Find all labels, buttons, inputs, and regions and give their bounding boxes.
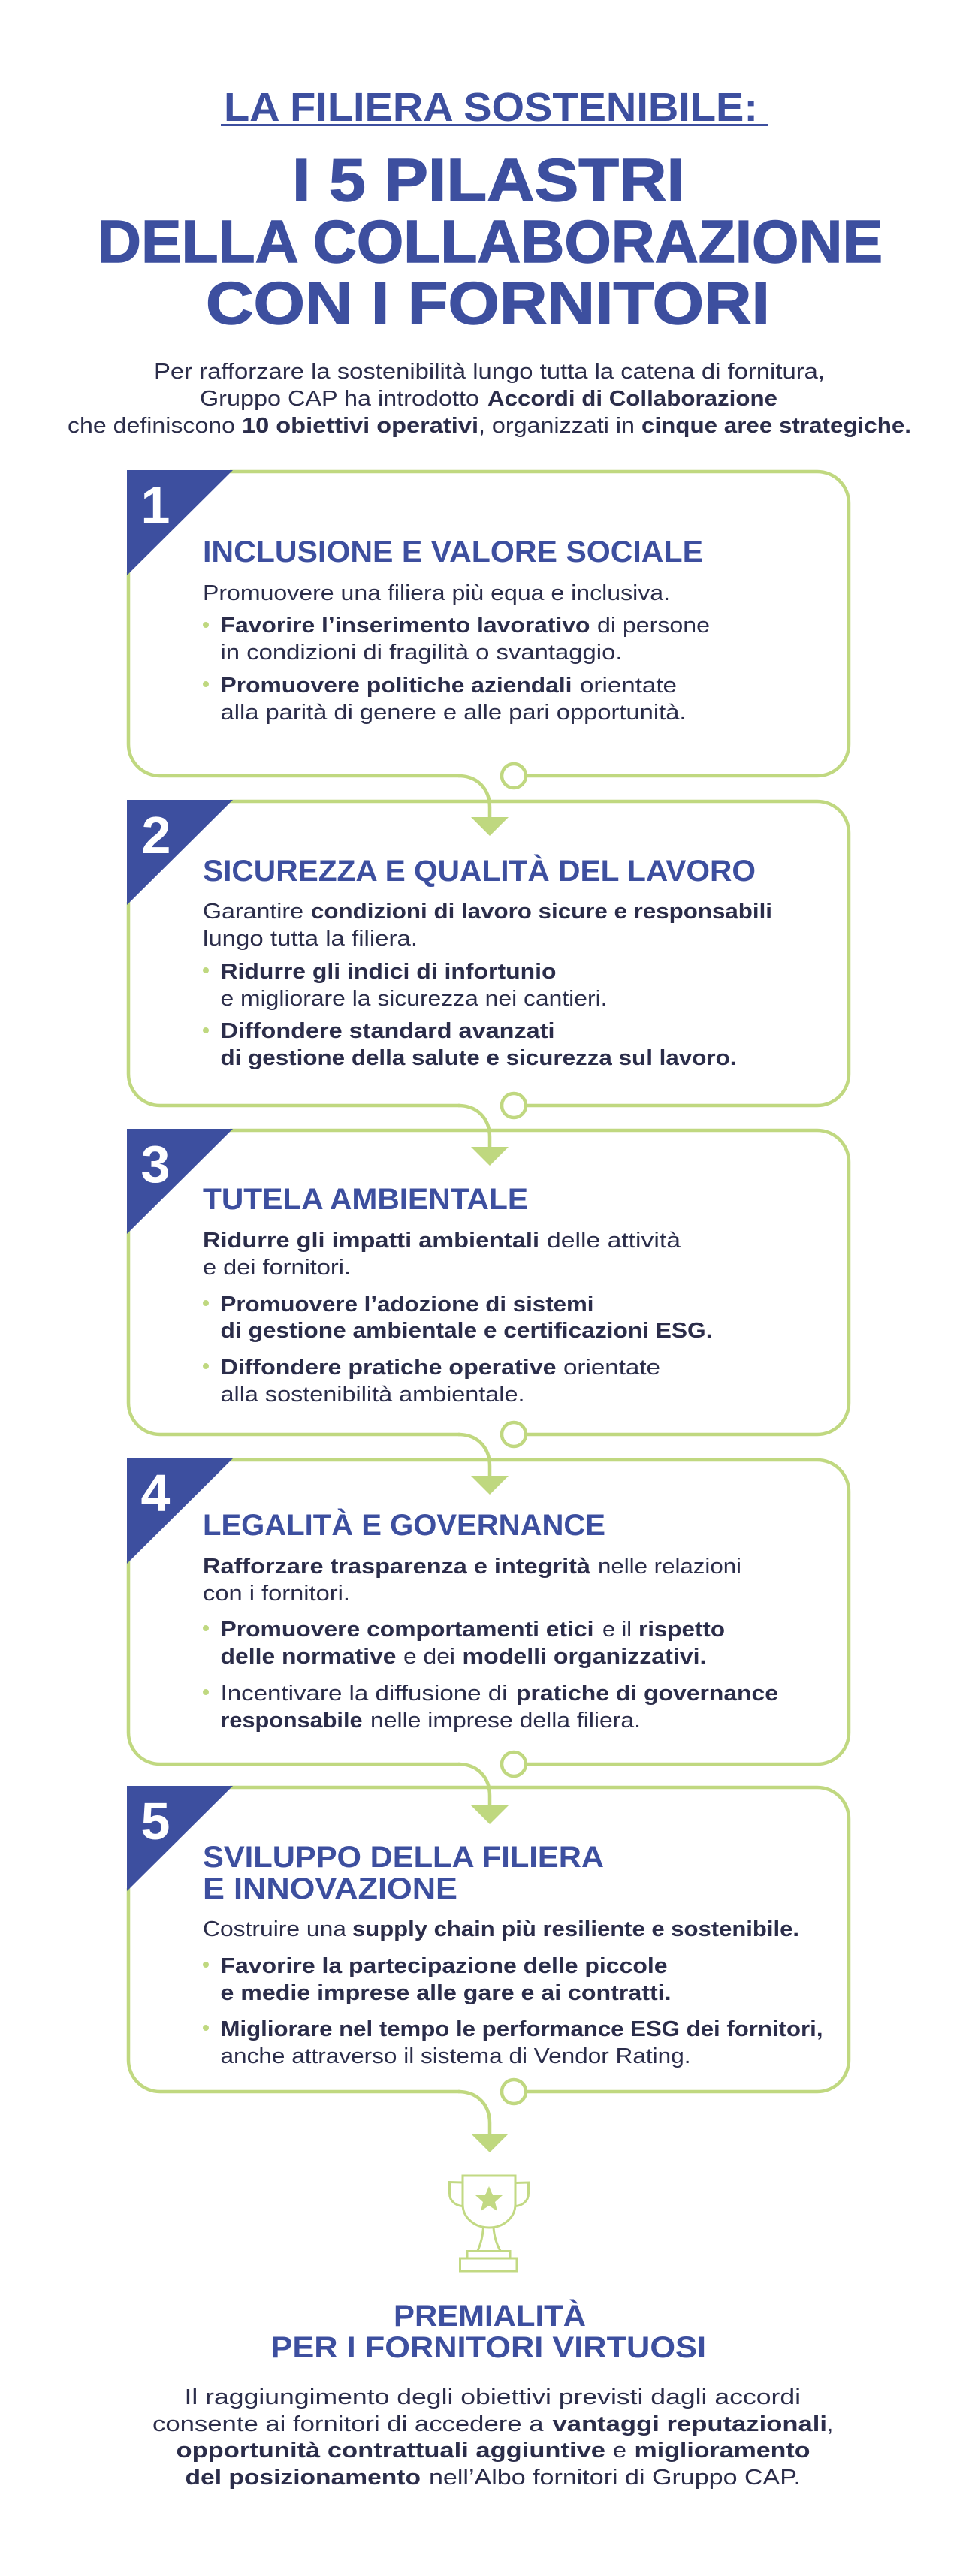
heading 5: E INNOVAZIONE [203,1872,457,1905]
number badge 4 [127,1458,233,1564]
bullet 1.1 [203,614,710,665]
intro text: 10 obiettivi operativi [242,414,478,438]
bullet 4.2 [203,1682,778,1733]
description 5: supply chain più resiliente e sostenibile. [352,1917,799,1941]
bullet 2.2: Diffondere standard avanzati [221,1019,554,1043]
main title: CON I FORNITORI [206,270,770,336]
reward text: e [613,2439,626,2463]
number badge 3: 3 [141,1135,170,1193]
reward text: nell’Albo fornitori di Gruppo CAP. [429,2466,801,2490]
reward text: opportunità contrattuali aggiuntive [176,2439,605,2463]
bullet 4.2: responsabile [221,1709,362,1733]
intro text: Per rafforzare la sostenibilità lungo tutta la catena di fornitura, [154,360,825,384]
bullet 3.1 [203,1293,712,1343]
heading 1: INCLUSIONE E VALORE SOCIALE [203,535,703,569]
reward heading [270,2299,706,2364]
intro text [68,360,911,438]
connector circle 1 [502,764,526,788]
panel: pillar 4 legalità e governance [127,1458,849,1776]
heading 4: LEGALITÀ E GOVERNANCE [203,1508,605,1542]
connector circle 4 [502,1752,526,1776]
bullet 3.1: di gestione ambientale e certificazioni ESG. [221,1319,712,1343]
bullet 2.1 [203,960,607,1011]
bullet 2.1: e migliorare la sicurezza nei cantieri. [221,987,607,1011]
bullet 4.1: delle normative [221,1645,397,1669]
bullet 2.2: di gestione della salute e sicurezza sul lavoro. [221,1046,736,1070]
intro text: Gruppo CAP ha introdotto [200,387,479,411]
description 3: Ridurre gli impatti ambientali [203,1229,539,1253]
reward text: miglioramento [634,2439,810,2463]
number badge 5: 5 [141,1792,170,1851]
bullet 1.2 [203,674,687,725]
bullet 2.1: Ridurre gli indici di infortunio [221,960,556,984]
number badge 2: 2 [142,806,171,864]
panel: pillar 1 inclusione e valore sociale [127,470,849,788]
icon: trophy [449,2176,529,2271]
number badge 3 [127,1129,233,1234]
bullet 5.1: e medie imprese alle gare e ai contratti. [221,1981,672,2005]
bullet 2.2 [203,1019,736,1070]
panel: pillar 3 tutela ambientale [127,1129,849,1446]
bullet 5.2: Migliorare nel tempo le performance ESG dei fornitori, [221,2017,823,2041]
card frame 1 [128,472,849,776]
description 4: con i fornitori. [203,1582,350,1606]
bullet 5.1 [203,1954,672,2005]
bullet 4.2: Incentivare la diffusione di [221,1682,508,1706]
number badge 1: 1 [141,476,170,535]
description 2: Garantire [203,900,303,924]
bullet 1.1: di persone [597,614,710,638]
panel: pillar 2 sicurezza e qualità del lavoro [127,800,849,1118]
card frame 2 [128,801,849,1106]
intro text: che definiscono [68,414,235,438]
description 2 [203,900,772,951]
bullet 4.1: modelli organizzativi. [463,1645,706,1669]
reward text: consente ai fornitori di accedere a [152,2412,545,2436]
card frame 3 [128,1130,849,1434]
footer: reward [152,2299,833,2490]
heading 3: TUTELA AMBIENTALE [203,1183,528,1216]
bullet 4.2: nelle imprese della filiera. [370,1709,641,1733]
bullet 1.2: Promuovere politiche aziendali [221,674,572,698]
bullet 3.2: orientate [563,1356,660,1380]
number badge 1 [127,470,233,575]
main title: I 5 PILASTRI [292,146,685,213]
bullet 5.1: Favorire la partecipazione delle piccole [221,1954,667,1978]
reward text: , [827,2412,833,2436]
description 1: Promuovere una filiera più equa e inclusiva. [203,581,670,605]
bullet 4.1: rispetto [638,1618,725,1642]
heading 2: SICUREZZA E QUALITÀ DEL LAVORO [203,854,756,888]
arrow: pillar 5 to reward [458,2092,509,2152]
card frame 5 [128,1787,849,2092]
description 5: Costruire una [203,1917,347,1941]
bullet 4.2: pratiche di governance [516,1682,778,1706]
bullet 3.2: alla sostenibilità ambientale. [221,1383,524,1407]
intro text: , organizzati in [478,414,635,438]
heading 5: SVILUPPO DELLA FILIERA [203,1841,604,1874]
connector circle 3 [502,1422,526,1446]
number badge 5 [127,1786,233,1891]
main title [98,146,883,336]
description 2: lungo tutta la filiera. [203,927,418,951]
connector circle 5 [502,2080,526,2104]
bullet 5.2 [203,2017,823,2068]
bullet 4.1: e il [602,1618,632,1642]
number badge 2 [127,800,233,905]
panel: pillar 5 sviluppo della filiera e innovazione [127,1786,849,2104]
description 3: e dei fornitori. [203,1256,351,1280]
description 3 [203,1229,681,1280]
kicker title: LA FILIERA SOSTENIBILE: [224,85,758,130]
description 4: nelle relazioni [598,1555,741,1579]
arrow: pillar 2 to 3 [458,1106,509,1166]
bullet 1.2: alla parità di genere e alle pari opportunità. [221,701,687,725]
reward heading: PREMIALITÀ [394,2299,586,2333]
bullet 4.1: e dei [403,1645,455,1669]
bullet 4.1 [203,1618,725,1669]
reward text: vantaggi reputazionali [553,2412,827,2436]
bullet 1.1: in condizioni di fragilità o svantaggio. [221,641,622,665]
arrow: pillar 4 to 5 [458,1764,509,1824]
description 4 [203,1555,741,1606]
reward text: Il raggiungimento degli obiettivi previsti dagli accordi [185,2385,801,2409]
arrow: pillar 3 to 4 [458,1434,509,1495]
number badge 4: 4 [141,1464,171,1522]
connector circle 2 [502,1093,526,1118]
bullet 5.2: anche attraverso il sistema di Vendor Rating. [221,2044,691,2068]
reward heading: PER I FORNITORI VIRTUOSI [270,2331,706,2364]
header [68,85,911,438]
arrow: pillar 1 to 2 [458,776,509,836]
description 4: Rafforzare trasparenza e integrità [203,1555,591,1579]
reward text [152,2385,833,2490]
intro text: cinque aree strategiche. [641,414,911,438]
bullet 3.2 [203,1356,660,1407]
description 3: delle attività [547,1229,681,1253]
bullet 1.2: orientate [580,674,677,698]
bullet 4.1: Promuovere comportamenti etici [221,1618,593,1642]
bullet 3.2: Diffondere pratiche operative [221,1356,556,1380]
main title: DELLA COLLABORAZIONE [98,208,883,275]
reward text: del posizionamento [185,2466,421,2490]
heading 5 [203,1841,604,1905]
card frame 4 [128,1460,849,1764]
bullet 1.1: Favorire l’inserimento lavorativo [221,614,590,638]
bullet 3.1: Promuovere l’adozione di sistemi [221,1293,593,1317]
intro text: Accordi di Collaborazione [487,387,777,411]
description 2: condizioni di lavoro sicure e responsabili [311,900,772,924]
